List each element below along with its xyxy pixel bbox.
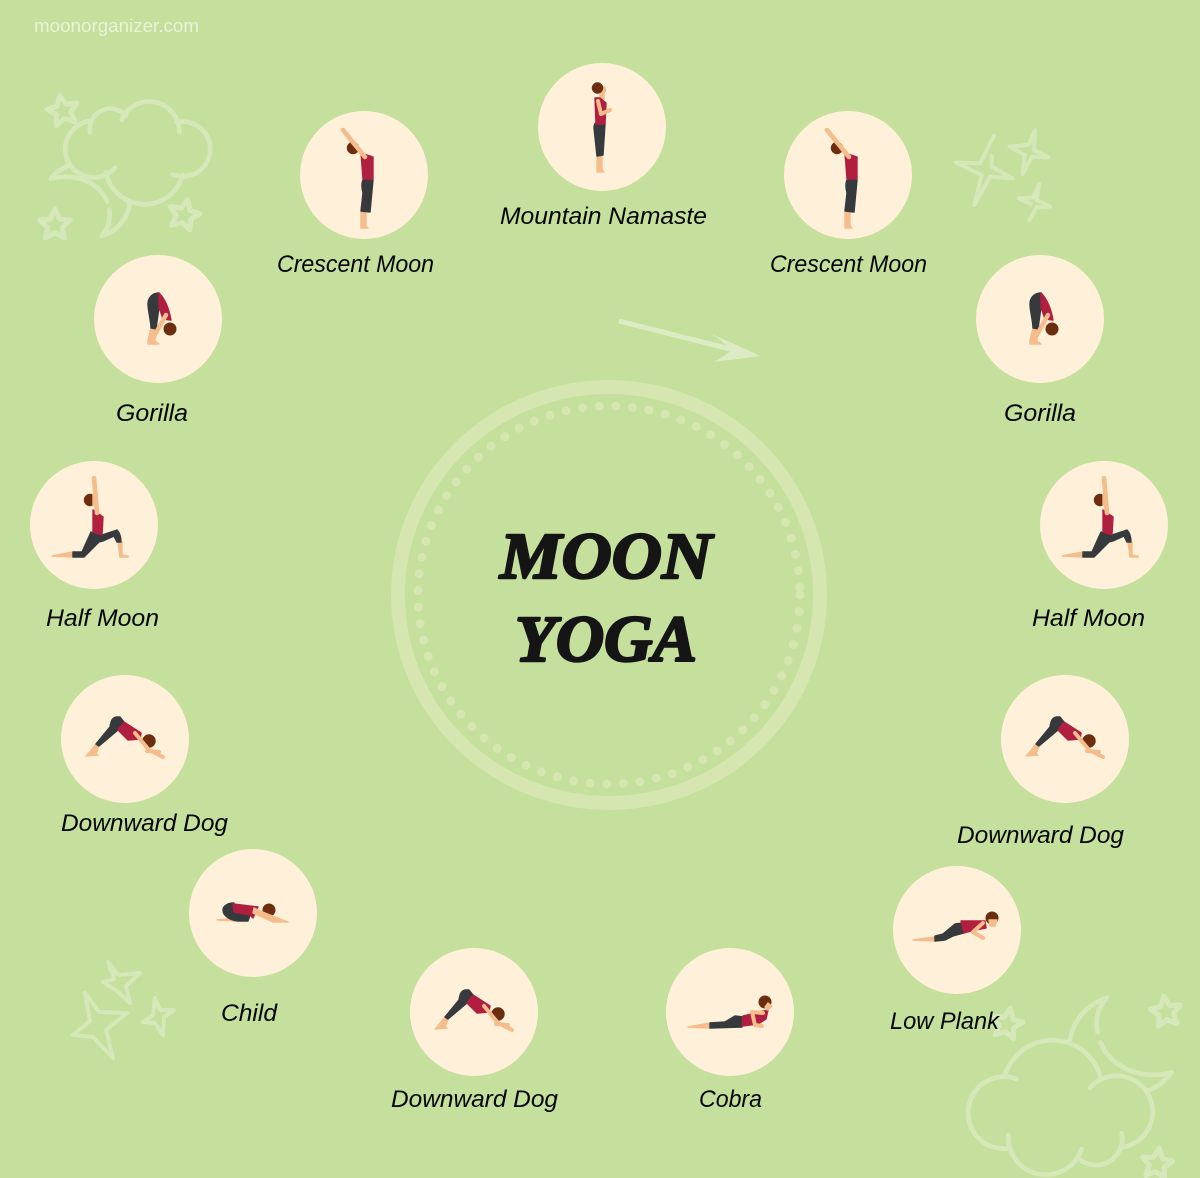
website credit: moonorganizer.com [34,16,199,36]
pose: Crescent Moon left [277,111,434,278]
outer ring [398,387,820,803]
pose: Downward Dog left [61,675,229,837]
center ring with title [398,387,820,803]
title: MOON [499,520,714,593]
pose: Mountain Namaste [500,63,707,230]
pose: Half Moon left [30,461,159,632]
pose: Child: Child [221,1000,278,1027]
icon: cloud, moon and stars bottom right [968,994,1183,1178]
icon: cloud, moon and stars top left [40,92,210,238]
pose: Downward Dog left: Downward Dog [61,810,229,837]
pose: Crescent Moon right: Crescent Moon [770,251,927,278]
pose: Low Plank: Low Plank [890,1008,1001,1035]
pose: Child [189,849,317,1027]
pose: Gorilla right [976,255,1104,427]
pose: Gorilla right: Gorilla [1004,400,1076,427]
pose: Mountain Namaste: Mountain Namaste [500,203,707,230]
pose: Half Moon left: Half Moon [46,605,159,632]
pose: Low Plank [890,866,1021,1035]
pose: Downward Dog bottom: Downward Dog [391,1086,559,1113]
pose: Half Moon right: Half Moon [1032,605,1145,632]
pose: Cobra: Cobra [699,1086,762,1113]
title: YOGA [515,603,697,676]
dotted ring [418,406,800,784]
pose: Downward Dog bottom [391,948,559,1113]
title [499,520,714,676]
pose: Crescent Moon left: Crescent Moon [277,251,434,278]
arrow [619,321,761,362]
pose: Gorilla left [94,255,222,427]
pose: Cobra [666,948,794,1113]
pose: Half Moon right [1032,461,1168,632]
pose: Crescent Moon right [770,111,927,278]
pose: Downward Dog right: Downward Dog [957,822,1125,849]
icon: sparkles top right [956,130,1050,220]
pose: Downward Dog right [957,675,1129,849]
pose: Gorilla left: Gorilla [116,400,188,427]
icon: sparkles bottom left [73,962,174,1058]
